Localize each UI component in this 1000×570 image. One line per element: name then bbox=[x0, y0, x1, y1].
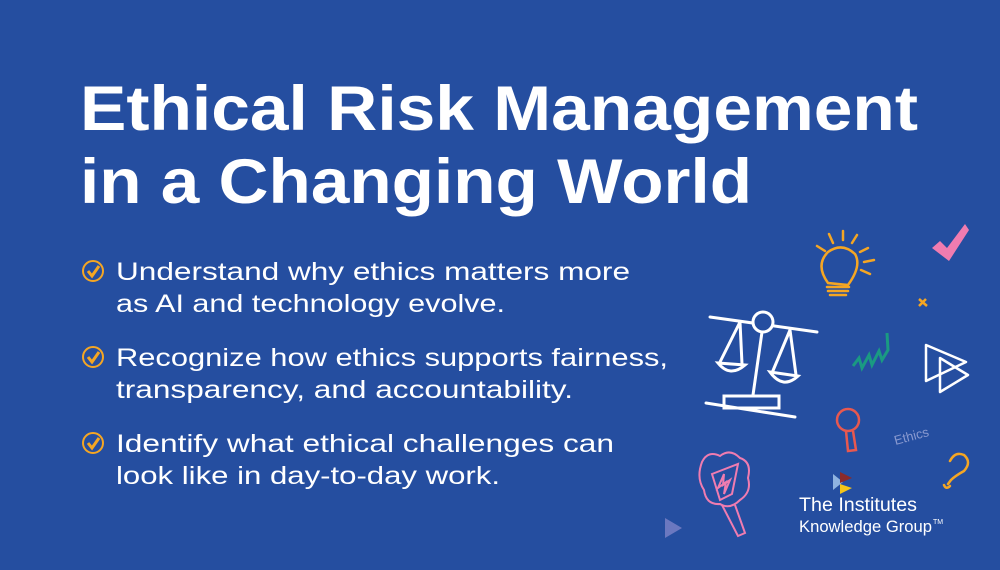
bullet 2: transparency, and accountability. bbox=[116, 376, 573, 404]
bullet 1: as AI and technology evolve. bbox=[116, 290, 505, 318]
bullet 3: look like in day-to-day work. bbox=[116, 462, 500, 490]
title bbox=[80, 74, 918, 217]
icon: lightbulb bbox=[817, 231, 874, 295]
icon: small triangle bbox=[665, 518, 682, 538]
icon: question mark bbox=[944, 454, 968, 488]
icon: scales of justice bbox=[706, 312, 817, 417]
icon: pink mirror bbox=[699, 452, 749, 536]
title: Ethical Risk Management bbox=[80, 74, 918, 144]
logo: The Institutes bbox=[799, 495, 917, 516]
bullet list bbox=[83, 258, 668, 490]
icon: double triangle bbox=[926, 345, 968, 392]
icon: green zigzag bbox=[853, 333, 888, 368]
bullet 3 bbox=[83, 430, 614, 490]
bullet 1 bbox=[83, 258, 630, 318]
icon: small cross bbox=[919, 299, 927, 306]
logo: Knowledge Group bbox=[799, 517, 932, 536]
bullet 2: Recognize how ethics supports fairness, bbox=[116, 344, 668, 372]
bullet 1: Understand why ethics matters more bbox=[116, 258, 630, 286]
logo: TM bbox=[933, 519, 943, 526]
icon: magnifier bbox=[837, 409, 859, 451]
bullet 2 bbox=[83, 344, 668, 404]
ethics label: Ethics bbox=[892, 424, 931, 448]
title: in a Changing World bbox=[80, 147, 752, 217]
bullet 3: Identify what ethical challenges can bbox=[116, 430, 614, 458]
icon: pink check bbox=[932, 224, 969, 261]
logo bbox=[799, 472, 943, 536]
